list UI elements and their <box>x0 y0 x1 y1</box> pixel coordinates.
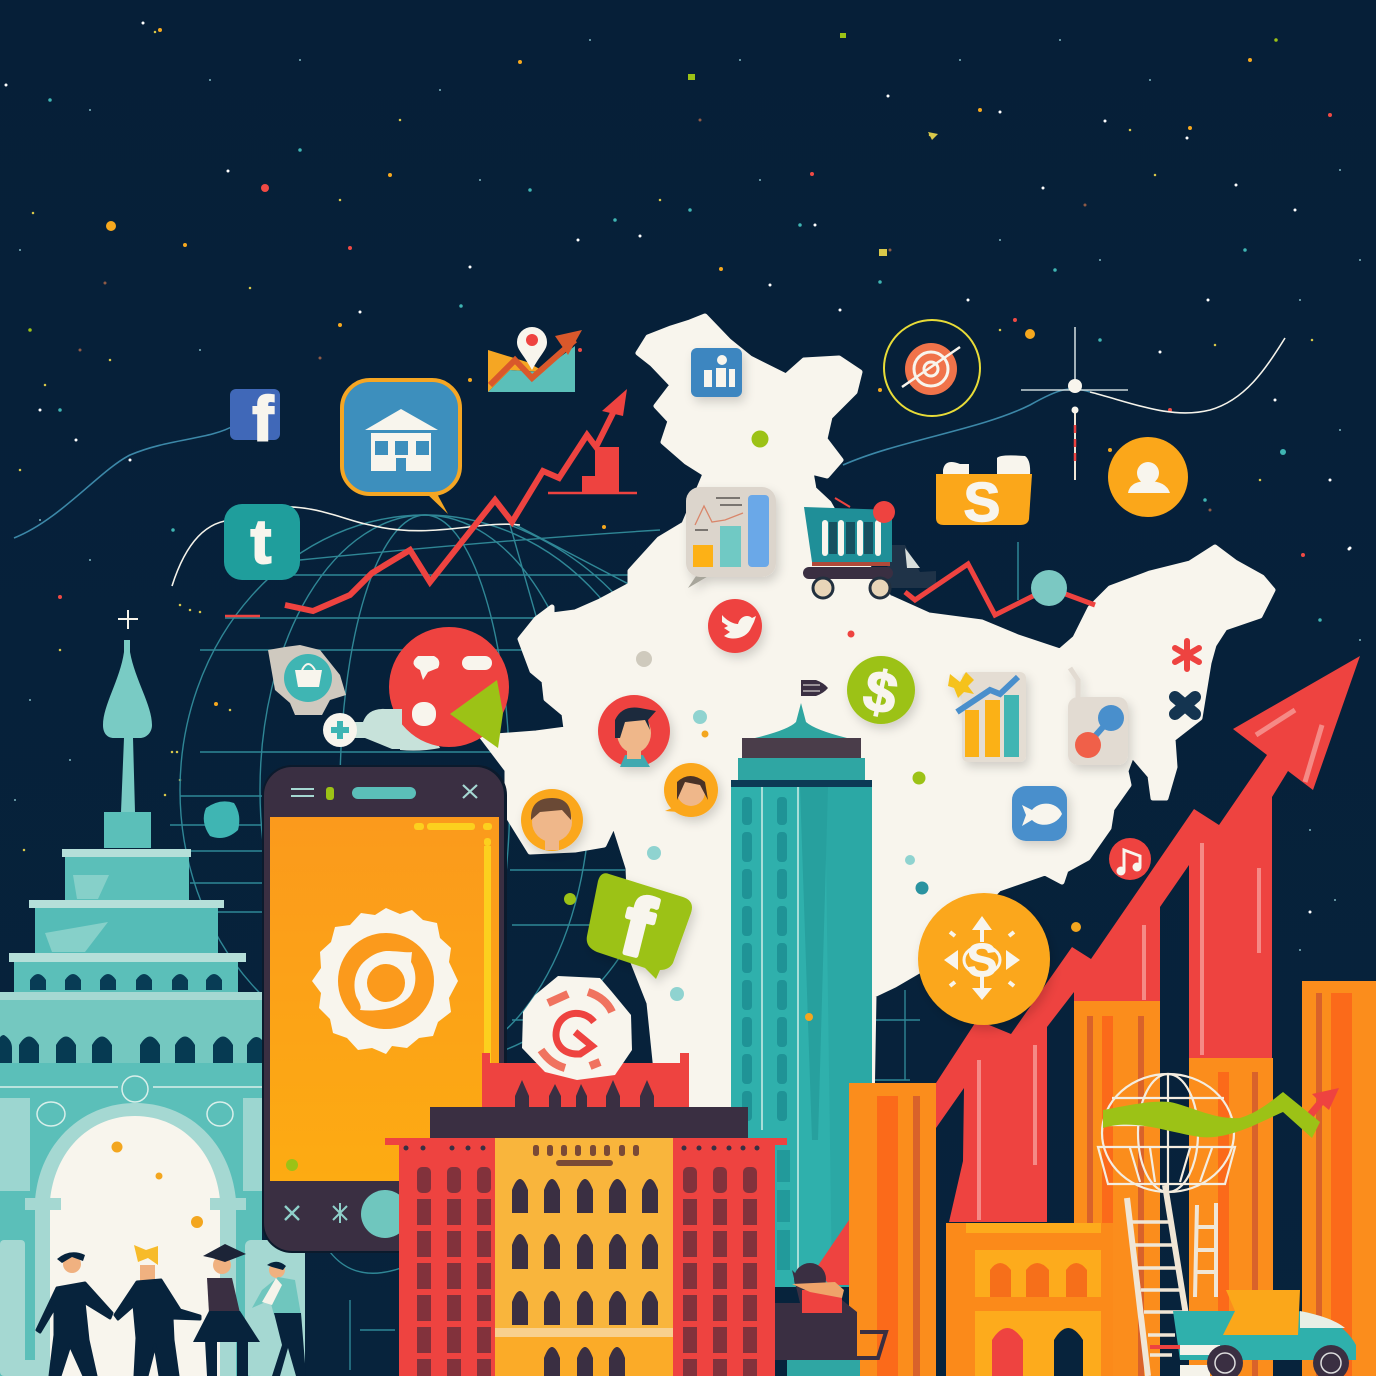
icon: green facebook bubble <box>587 873 692 979</box>
red rising line chart <box>225 389 637 616</box>
icon: LinkedIn style bars <box>691 348 742 397</box>
people holding hands <box>37 1244 306 1376</box>
map dots <box>564 430 1081 1021</box>
icon: green dollar circle: $ <box>858 657 903 728</box>
avatar: woman on orange circle <box>664 763 718 817</box>
person three <box>193 1244 260 1376</box>
icon: music note circle <box>1109 838 1151 880</box>
icon: house speech bubble <box>342 380 460 514</box>
avatar: boy on orange circle <box>521 789 583 851</box>
icon: target in ring <box>884 320 980 416</box>
icon: G badge <box>522 976 632 1080</box>
thin trend curves <box>14 338 1285 586</box>
cross <box>118 610 138 629</box>
thin wire globe behind the map <box>170 515 920 1370</box>
person in chair <box>775 1263 886 1376</box>
avatar: man on red circle <box>598 695 670 767</box>
smartphone <box>262 765 507 1253</box>
person two <box>115 1245 200 1376</box>
icon: toggle node card <box>1068 668 1128 765</box>
icon: red chat bubble with green arrow <box>389 627 509 751</box>
icon: orange dollar compass circle: S <box>967 934 997 986</box>
icon: facebook square <box>230 385 280 454</box>
person four <box>252 1262 306 1376</box>
icon: crosshair node <box>1021 327 1128 480</box>
wire globe on ladder tower <box>1098 1074 1235 1192</box>
icon: user circle <box>1108 437 1188 517</box>
map of India <box>482 316 1273 1110</box>
icon: cargo truck <box>803 498 936 598</box>
red zigzag with node <box>905 542 1095 615</box>
teal blob node <box>204 801 239 838</box>
icon: plus circle with connector <box>323 709 402 749</box>
red wing windows <box>417 1167 757 1376</box>
central palace building <box>385 1053 787 1376</box>
icon: facebook square: f <box>253 385 274 454</box>
icon: twitter bird circle <box>708 599 762 653</box>
icon: green facebook bubble: f <box>613 880 662 975</box>
archway <box>35 1103 236 1376</box>
person one <box>37 1252 112 1376</box>
phone screen yellow highlights <box>414 823 492 1126</box>
icon: map pin chart <box>488 327 582 392</box>
icon: orange dollar compass circle <box>918 893 1050 1025</box>
skyscraper tower <box>731 703 872 1287</box>
icon: analytics card <box>686 487 776 588</box>
icon: small dark feather <box>801 680 828 696</box>
centre arched windows <box>512 1179 658 1376</box>
centre small windows <box>533 1145 639 1166</box>
scattered stars and confetti <box>6 23 1360 950</box>
left teal domed building <box>0 610 305 1376</box>
gear logo <box>312 908 458 1054</box>
icon: teal t tile <box>224 504 300 580</box>
green ribbon trend with red arrow <box>1103 1088 1339 1138</box>
icon: navy cross <box>1175 697 1195 714</box>
icon: dollar folder: S <box>964 471 1000 533</box>
cornice dots <box>404 1146 760 1150</box>
giant red growth arrow <box>815 656 1360 1285</box>
icon: red asterisk <box>1175 641 1199 669</box>
icon: blue fish tile <box>1012 786 1067 841</box>
delivery car <box>1150 1290 1356 1376</box>
icon: green dollar circle <box>847 656 915 728</box>
icon: bar chart with rising arrow <box>948 672 1026 762</box>
phone top bar <box>291 785 477 800</box>
icon: dollar folder <box>936 455 1032 533</box>
icon: teal shopping badge <box>268 645 346 715</box>
phone bottom controls <box>285 1190 409 1238</box>
ladders <box>1127 1185 1216 1376</box>
orange tall buildings <box>849 981 1376 1376</box>
icon: teal t tile: t <box>251 508 271 577</box>
low orange arched building <box>946 1223 1113 1376</box>
